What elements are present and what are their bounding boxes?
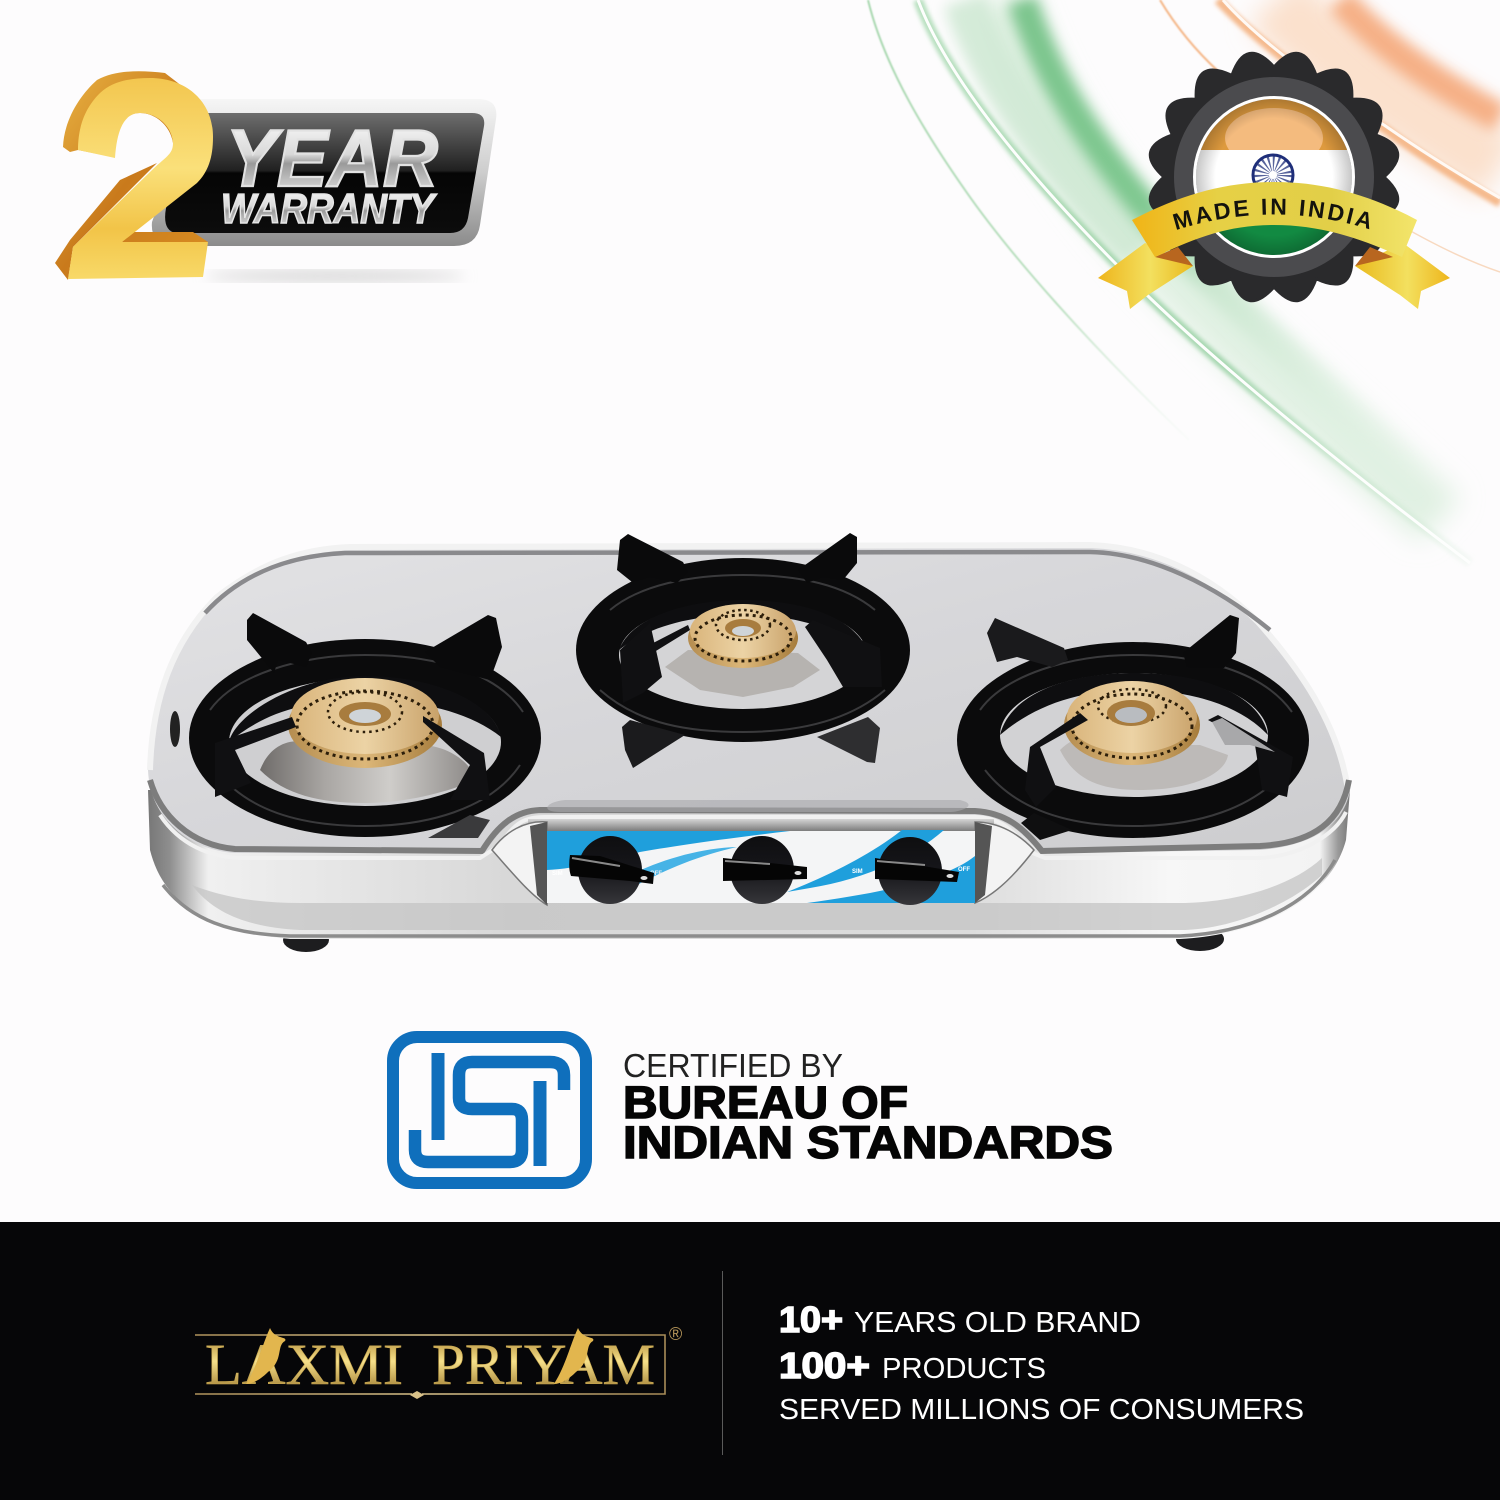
knob 1 bbox=[569, 836, 654, 904]
stove top plate bbox=[148, 543, 1350, 853]
panel blue bottom right bbox=[807, 856, 975, 903]
stove feet bbox=[283, 927, 1224, 952]
control recess bbox=[492, 819, 1034, 905]
ribbon folds bbox=[1155, 247, 1393, 266]
stove front wall bbox=[148, 790, 1350, 939]
right arm left bbox=[1025, 713, 1088, 807]
flag ring bbox=[1194, 98, 1354, 256]
recess right bbox=[975, 822, 1034, 903]
chakra bbox=[1253, 155, 1293, 195]
logo flame one bbox=[246, 1328, 285, 1384]
brand logo bbox=[195, 1324, 682, 1399]
left brass bbox=[288, 678, 442, 768]
footer band bbox=[0, 1222, 1500, 1500]
knob 3 bbox=[875, 837, 959, 905]
word WARRANTY: WARRANTY bbox=[221, 185, 437, 232]
recess shadows bbox=[530, 822, 992, 905]
front rim edge bbox=[150, 780, 1349, 851]
right arm reflection bbox=[1212, 718, 1275, 752]
registered mark: ® bbox=[669, 1324, 682, 1344]
ribbon right tail bbox=[1355, 243, 1450, 309]
warranty badge bbox=[55, 71, 496, 281]
lower front reflection bbox=[192, 858, 1322, 930]
ISI certification bbox=[393, 1037, 1113, 1183]
ribbon band bbox=[1132, 182, 1417, 257]
right arm bbox=[423, 716, 490, 800]
plate shadow bbox=[205, 271, 465, 281]
ribbon left tail bbox=[1098, 243, 1193, 309]
recess top shadow bbox=[528, 819, 994, 833]
left cup bbox=[260, 741, 476, 803]
left pan support top right bbox=[425, 615, 502, 680]
left arm bbox=[215, 717, 296, 797]
right brass bbox=[1064, 681, 1200, 765]
fact one label: YEARS OLD BRAND bbox=[854, 1307, 1141, 1339]
centre pan support bottom left bbox=[622, 720, 685, 768]
logo frame bbox=[195, 1335, 665, 1394]
left pan support top left bbox=[247, 613, 312, 673]
centre pan support bottom right bbox=[817, 717, 880, 763]
recess left bbox=[492, 822, 547, 905]
right ring bbox=[957, 642, 1309, 838]
centre ring bbox=[576, 558, 910, 742]
control panel bbox=[547, 830, 975, 903]
silver plate bbox=[152, 99, 496, 246]
top rim dark stripe bbox=[205, 552, 1270, 630]
left pan support bottom bbox=[428, 815, 490, 838]
grey ring bbox=[1174, 77, 1374, 277]
centre burner bbox=[576, 533, 910, 768]
left hole shade bbox=[229, 676, 501, 742]
centre ring gloss bbox=[600, 575, 885, 732]
numeral 2 front bbox=[68, 78, 213, 279]
black plate bbox=[165, 113, 484, 233]
logo diamond bbox=[410, 1391, 424, 1399]
panel label 1: SIM bbox=[552, 871, 563, 877]
right hole shade bbox=[1000, 673, 1268, 735]
knob 2 bbox=[723, 836, 807, 904]
right arm right bbox=[1208, 715, 1293, 797]
indian standards: INDIAN STANDARDS bbox=[623, 1117, 1113, 1168]
made in india seal bbox=[1098, 52, 1450, 309]
fact three: SERVED MILLIONS OF CONSUMERS bbox=[779, 1394, 1304, 1426]
centre right arm bbox=[805, 620, 882, 687]
panel light sweep bbox=[628, 847, 737, 885]
left ring bbox=[189, 639, 541, 837]
centre hole shade bbox=[619, 600, 867, 650]
front rim light bbox=[160, 812, 1346, 858]
top plate reflection bbox=[547, 800, 969, 812]
logo flame two bbox=[554, 1328, 593, 1384]
right ring gloss bbox=[980, 655, 1292, 826]
tricolour swooshes bbox=[868, 0, 1500, 563]
flag disc bbox=[1196, 99, 1352, 255]
logo word laxmi: LAXMI bbox=[205, 1332, 403, 1397]
left burner bbox=[189, 613, 541, 837]
bottom edge band bbox=[163, 860, 1335, 936]
left hole bbox=[229, 678, 501, 806]
ISI mark bbox=[393, 1037, 586, 1183]
left ring gloss bbox=[210, 655, 523, 826]
top rim highlights bbox=[150, 545, 1348, 790]
logo word priyam: PRIYAM bbox=[432, 1332, 655, 1397]
ribbon text: MADE IN INDIA bbox=[1172, 198, 1370, 230]
centre cup bbox=[665, 650, 820, 697]
right cup bbox=[1060, 738, 1228, 790]
panel label 3: SIM bbox=[852, 869, 863, 875]
brand facts bbox=[779, 1299, 1304, 1426]
left slit bbox=[170, 711, 180, 747]
fact one number: 10+ bbox=[779, 1299, 843, 1340]
centre left arm bbox=[620, 623, 690, 703]
centre brass bbox=[688, 604, 798, 668]
word YEAR: YEAR bbox=[226, 114, 438, 204]
panel label 2: OFF bbox=[650, 871, 662, 877]
footer divider bbox=[722, 1271, 723, 1455]
centre pan support top left bbox=[617, 534, 688, 583]
centre hole bbox=[619, 601, 867, 709]
right pan support bottom bbox=[1021, 813, 1072, 840]
certified by: CERTIFIED BY bbox=[623, 1047, 843, 1084]
panel blue sweep right bbox=[787, 830, 944, 892]
numeral 2 extrusion bbox=[55, 71, 208, 280]
panel blue top-left bbox=[547, 831, 790, 870]
gas stove product bbox=[148, 533, 1350, 952]
bureau of: BUREAU OF bbox=[623, 1077, 908, 1128]
right burner bbox=[957, 615, 1309, 840]
panel label 4: OFF bbox=[958, 867, 970, 873]
fact two number: 100+ bbox=[779, 1345, 870, 1386]
right pan support top left bbox=[987, 618, 1068, 667]
right hole bbox=[1000, 673, 1268, 797]
scalloped seal bbox=[1150, 53, 1398, 301]
panel base bbox=[547, 831, 975, 903]
right pan support top right bbox=[1183, 615, 1239, 668]
ribbon arc guide bbox=[1162, 214, 1386, 235]
centre pan support top right bbox=[798, 533, 857, 583]
fact two label: PRODUCTS bbox=[882, 1353, 1046, 1385]
